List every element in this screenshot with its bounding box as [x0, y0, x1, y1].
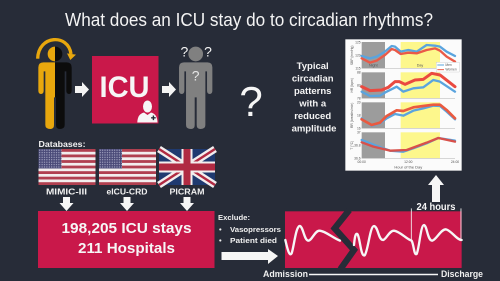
arrow: MIMIC-III down	[60, 197, 74, 211]
line chart: vital signs over the day: 37	[357, 131, 361, 135]
ICU panel: ICU	[100, 71, 150, 104]
arrow: up to circadian chart	[428, 175, 444, 202]
text block: exclusion criteria: Vasopressors	[230, 225, 281, 234]
text block: exclusion criteria: Patient died	[230, 236, 277, 245]
arrow: admission to discharge	[309, 274, 438, 276]
line chart: vital signs over the day: 12:00	[404, 160, 413, 164]
heading: databases: Databases:	[38, 140, 86, 149]
panel: cohort totals: 211 Hospitals	[78, 241, 175, 257]
line chart: vital signs over the day: 125	[355, 41, 361, 45]
label: PICRAM: PICRAM	[170, 186, 204, 196]
text block: typical circadian patterns: circadian	[292, 74, 334, 84]
line chart: vital signs over the day: 00:00	[357, 160, 366, 164]
panel: cohort totals	[38, 211, 214, 268]
arrow: cohort to timeline	[222, 249, 278, 264]
line chart: vital signs over the day: Day	[417, 64, 423, 68]
panel: cohort totals: 198,205 ICU stays	[62, 221, 192, 237]
label: 24 hours: 24 hours	[416, 202, 456, 213]
label: MIMIC-III: MIMIC-III	[46, 186, 87, 196]
line chart: vital signs over the day: 36.8	[354, 144, 361, 148]
arrow: ICU to affected person	[162, 82, 176, 97]
icon: person with intact circadian rhythm	[38, 40, 76, 129]
line chart: vital signs over the day: 115	[355, 66, 361, 70]
icon: grey person with uncertain rhythm: ?	[204, 44, 212, 60]
line chart: vital signs over the day	[345, 39, 462, 171]
arrow: person to ICU	[75, 82, 89, 97]
arrow: eICU-CRD down	[120, 197, 134, 211]
line chart: vital signs over the day: 78	[357, 96, 361, 100]
chart legend: Women	[445, 68, 457, 72]
label: admission: Admission	[263, 269, 308, 279]
panel: ICU stay timeline	[285, 208, 462, 269]
line chart: vital signs over the day: 36.6	[354, 156, 361, 160]
line chart: vital signs over the day: 16	[357, 126, 361, 130]
text block: typical circadian patterns: with a	[298, 98, 327, 110]
label: discharge: Discharge	[441, 269, 483, 279]
line chart: vital signs over the day: Night	[369, 64, 378, 68]
flag: USA for MIMIC-III	[38, 149, 96, 185]
line chart: vital signs over the day: 20	[357, 101, 361, 105]
line chart: vital signs over the day: 18	[357, 113, 361, 117]
flag: USA for eICU-CRD	[99, 149, 156, 185]
text block: exclusion criteria: Exclude:	[218, 213, 250, 222]
line chart: vital signs over the day: 120	[355, 53, 361, 57]
chart legend	[436, 62, 459, 72]
icon: grey person with uncertain rhythm: ?	[192, 68, 200, 84]
line chart: vital signs over the day: HR (bpm)	[350, 78, 354, 93]
icon: doctor	[137, 100, 158, 122]
text block: exclusion criteria: •	[219, 236, 222, 245]
ICU panel	[92, 56, 158, 124]
text block: typical circadian patterns: patterns	[294, 86, 331, 97]
text block: typical circadian patterns: amplitude	[292, 124, 336, 134]
line chart: vital signs over the day: RR (breaths/min)	[350, 103, 354, 128]
large question mark: ?	[239, 78, 263, 125]
text block: typical circadian patterns: Typical	[297, 61, 329, 72]
icon: grey person with uncertain rhythm	[179, 44, 212, 129]
label: eICU-CRD: eICU-CRD	[106, 186, 148, 196]
flag: UK for PICRAM	[159, 149, 215, 185]
line chart: vital signs over the day: 88	[357, 71, 361, 75]
line chart: vital signs over the day: T (°C)	[350, 141, 354, 150]
text block: typical circadian patterns: reduced	[294, 111, 331, 122]
heart-rate trace	[285, 225, 462, 255]
line chart: vital signs over the day: Hour of the Day	[394, 164, 422, 169]
text block: exclusion criteria: •	[219, 225, 222, 234]
line chart: vital signs over the day: 24:00	[451, 160, 459, 164]
icon: grey person with uncertain rhythm: ?	[180, 44, 188, 60]
arrow: PICRAM down	[180, 197, 194, 211]
text block: exclusion criteria	[218, 213, 281, 245]
title: What does an ICU stay do to circadian rhythms?	[65, 10, 433, 30]
line chart: vital signs over the day: 83	[357, 84, 361, 88]
line chart: vital signs over the day: SBP (mmHg)	[350, 46, 354, 65]
chart legend: Men	[445, 63, 452, 67]
